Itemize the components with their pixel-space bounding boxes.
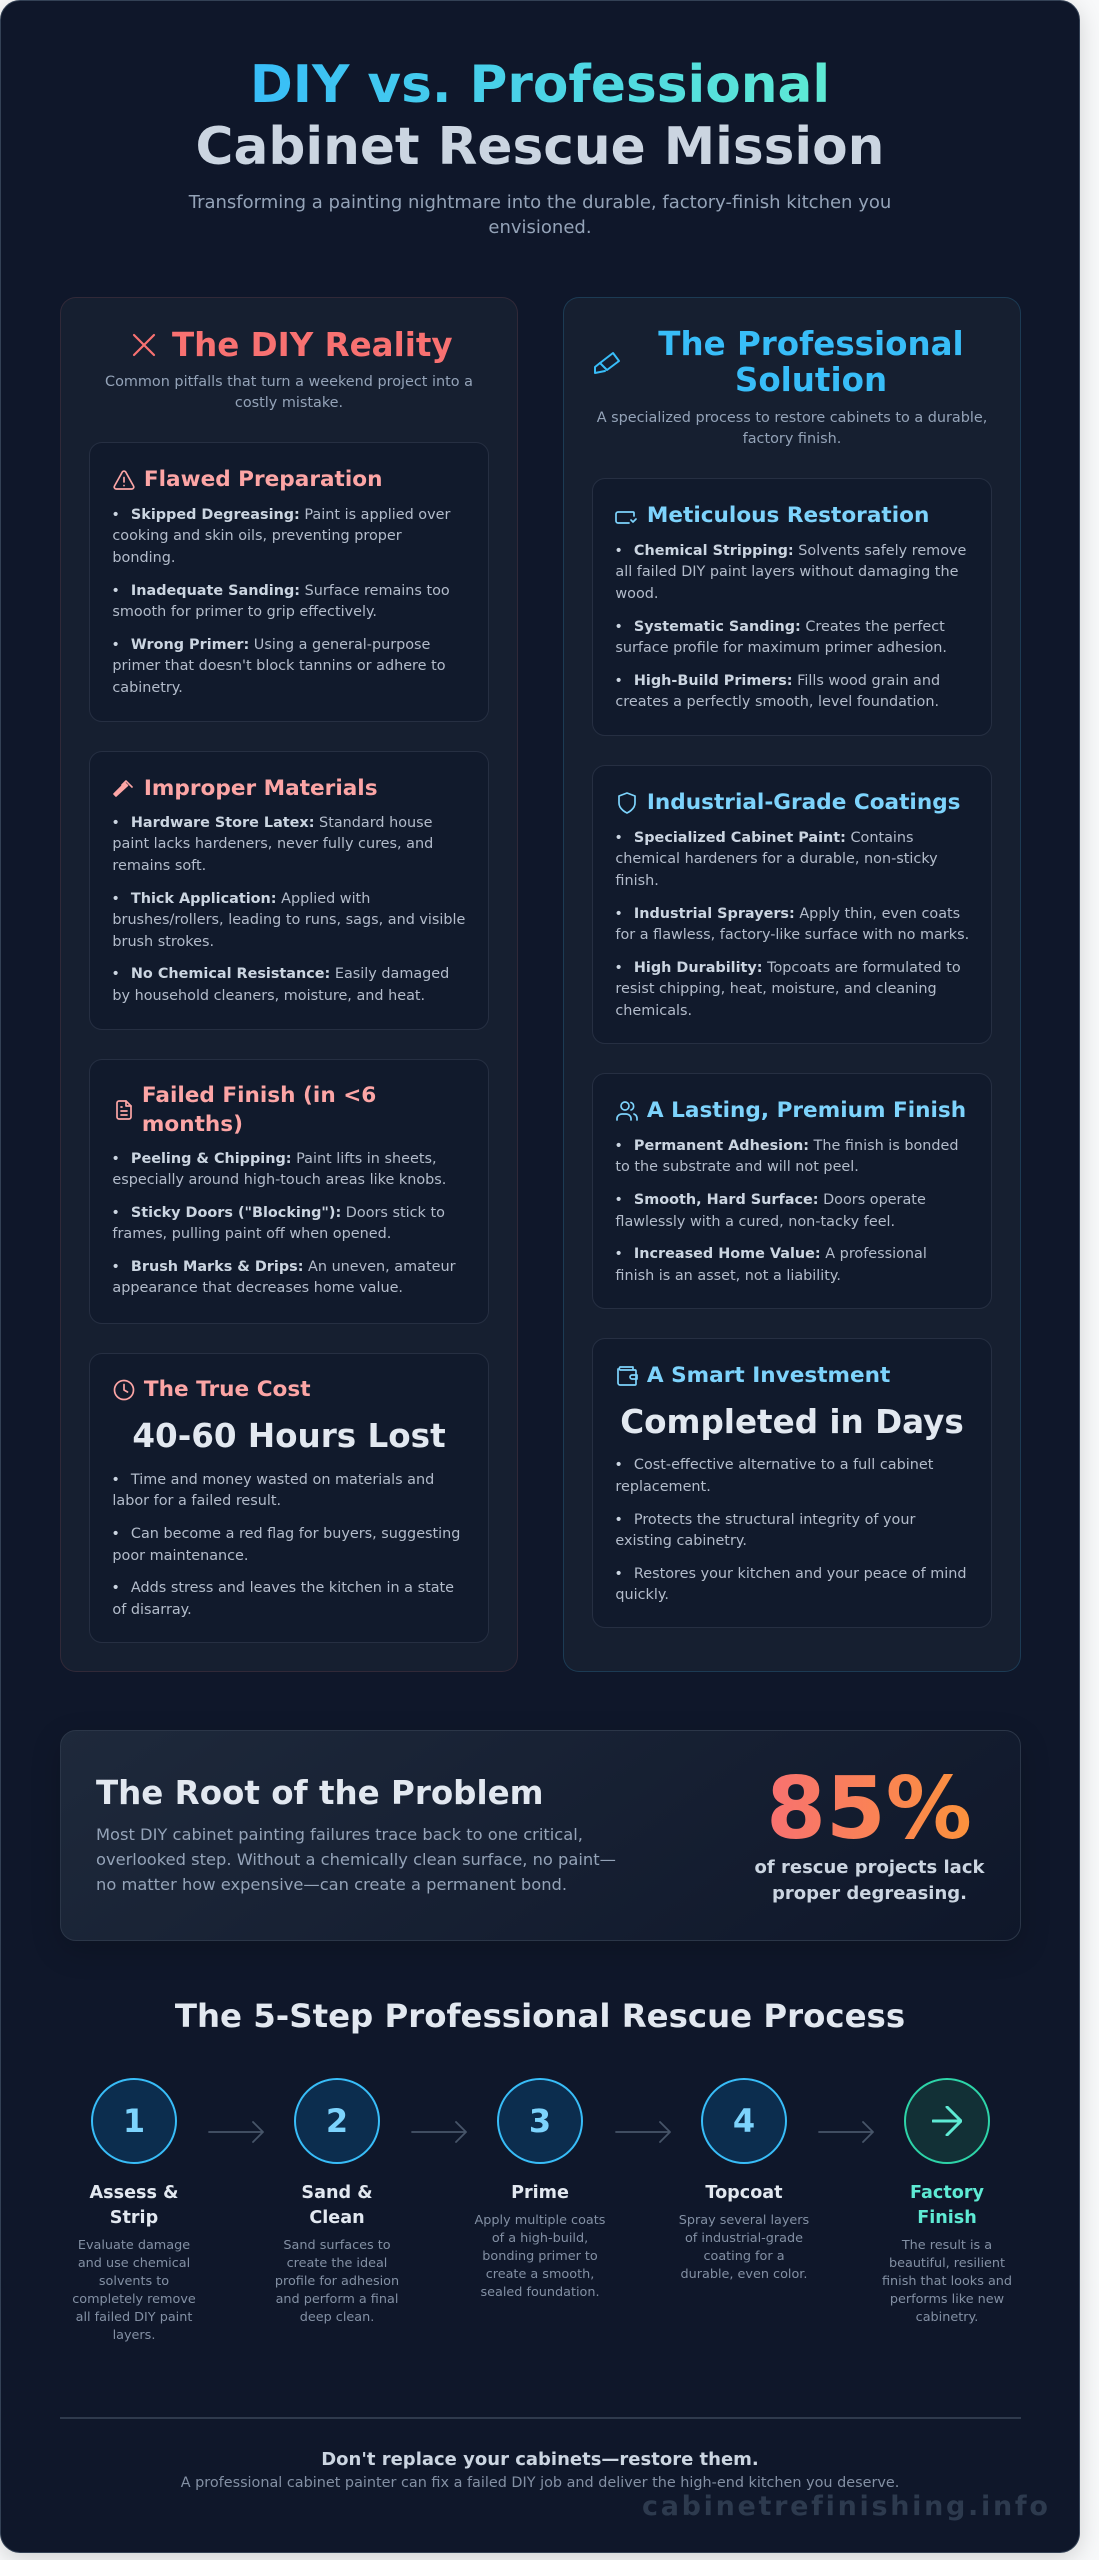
bullet list: Skipped Degreasing: Paint is applied over [131, 507, 450, 523]
bullet list: surface profile for maximum primer adhesion. [615, 640, 947, 656]
bullet list: • [111, 637, 120, 653]
arrow 2 [411, 2121, 467, 2143]
bullet list: all failed DIY paint layers without damaging the [615, 564, 958, 580]
bullet list: Industrial Sprayers: Apply thin, even coats [634, 906, 960, 922]
bullet list: finish. [615, 873, 659, 889]
card: flawed preparation [89, 442, 489, 722]
card heading: A Lasting, Premium Finish [647, 1098, 966, 1123]
professional subtitle: factory finish. [743, 431, 841, 447]
bullet list: • [111, 891, 120, 907]
bullet list: • [111, 1526, 120, 1542]
bullet list: • [614, 906, 623, 922]
card: meticulous restoration [592, 478, 992, 736]
icon: X [132, 334, 156, 356]
bullet list: Can become a red flag for buyers, suggesting [131, 1526, 460, 1542]
bullet list: Adds stress and leaves the kitchen in a state [131, 1580, 454, 1596]
step description: finish that looks and [882, 2274, 1012, 2289]
bullet list: • [111, 1472, 120, 1488]
bullet list [111, 815, 465, 1004]
bullet list: • [614, 1457, 623, 1473]
bullet list: appearance that decreases home value. [112, 1280, 403, 1296]
bullet list: Increased Home Value: A professional [634, 1246, 927, 1262]
step title [90, 2182, 178, 2228]
step description: coating for a [703, 2249, 785, 2264]
subtitle [188, 192, 891, 238]
bullet list: • [614, 830, 623, 846]
step description: Spray several layers [679, 2213, 809, 2228]
bullet list: quickly. [615, 1587, 669, 1603]
bullet list: • [111, 1205, 120, 1221]
number circle: 1 [123, 2102, 145, 2140]
bullet list: • [614, 1246, 623, 1262]
bullet list: • [111, 966, 120, 982]
footer text: A professional cabinet painter can fix a failed DIY job and deliver the high-end kitchen you deserve. [181, 2475, 899, 2491]
bullet list: Cost-effective alternative to a full cabinet [634, 1457, 933, 1473]
bullet list: Protects the structural integrity of your [634, 1512, 915, 1528]
bullet list: paint lacks hardeners, never fully cures, and [112, 836, 433, 852]
bullet list: remains soft. [112, 858, 206, 874]
number circle [497, 2078, 583, 2164]
bullet list: Inadequate Sanding: Surface remains too [131, 583, 450, 599]
number circle [701, 2078, 787, 2164]
professional heading: Solution [735, 361, 887, 399]
bullet list: High Durability: Topcoats are formulated to [634, 960, 961, 976]
step description: sealed foundation. [480, 2285, 600, 2300]
panel: the DIY reality [60, 297, 518, 1672]
bullet list: • [614, 1566, 623, 1582]
step description [474, 2213, 605, 2300]
bullet list: replacement. [615, 1479, 711, 1495]
bullet list: No Chemical Resistance: Easily damaged [131, 966, 449, 982]
bullet list: • [111, 1259, 120, 1275]
bullet list: • [111, 1580, 120, 1596]
step description [857, 2237, 1037, 2327]
card heading: Failed Finish (in <6 [142, 1083, 376, 1108]
arrow 4 [818, 2121, 874, 2143]
step description [72, 2238, 196, 2343]
bullet list: finish is an asset, not a liability. [615, 1268, 841, 1284]
DIY subtitle: costly mistake. [235, 395, 343, 411]
root text: overlooked step. Without a chemically clean surface, no paint— [96, 1850, 616, 1869]
bullet list: Brush Marks & Drips: An uneven, amateur [131, 1259, 456, 1275]
bullet list: • [614, 673, 623, 689]
bullet list: • [111, 1150, 120, 1166]
root text [96, 1825, 616, 1894]
step description [679, 2213, 809, 2282]
bullet list: by household cleaners, moisture, and heat. [112, 988, 425, 1004]
card heading: Industrial-Grade Coatings [647, 790, 961, 815]
step title: Clean [309, 2208, 365, 2228]
DIY subtitle: Common pitfalls that turn a weekend project into a [105, 374, 473, 390]
number circle: 3 [529, 2102, 551, 2140]
subtitle: Transforming a painting nightmare into the durable, factory-finish kitchen you [189, 192, 891, 213]
step description: of a high-build, [492, 2231, 588, 2246]
card: a lasting, premium finish [592, 1073, 992, 1309]
bullet list: especially around high-touch areas like knobs. [112, 1172, 446, 1188]
bullet list: • [614, 1512, 623, 1528]
step title [301, 2182, 373, 2228]
watermark: cabinetrefinishing.info [642, 2491, 1051, 2522]
step description: beautiful, resilient [889, 2256, 1005, 2271]
step 5 [857, 2078, 1037, 2358]
bullet list: labor for a failed result. [112, 1493, 281, 1509]
title [196, 55, 884, 176]
bullet list: Sticky Doors ("Blocking"): Doors stick to [131, 1205, 445, 1221]
step 1 [72, 2078, 196, 2343]
step description: performs like new [890, 2292, 1004, 2307]
stat caption [755, 1857, 985, 1904]
professional subtitle: A specialized process to restore cabinets to a durable, [597, 410, 987, 426]
number circle: 4 [733, 2102, 755, 2140]
step 4 [679, 2078, 809, 2282]
step description: Apply multiple coats [475, 2213, 605, 2228]
step description: create a smooth, [486, 2267, 594, 2282]
step description: and perform a final [276, 2292, 398, 2307]
bullet list: • [614, 1192, 623, 1208]
bullet list [614, 543, 966, 710]
title: DIY vs. Professional [250, 55, 830, 115]
step description: Evaluate damage [78, 2238, 190, 2253]
step title: Strip [110, 2208, 158, 2228]
bullet list: wood. [615, 586, 658, 602]
step description: of industrial-grade [685, 2231, 803, 2246]
bullet list: bonding. [112, 550, 175, 566]
card heading: months) [142, 1112, 243, 1137]
card heading: A Smart Investment [647, 1363, 890, 1388]
arrow 3 [615, 2121, 671, 2143]
card: the true cost [89, 1353, 489, 1643]
big stat: 40-60 Hours Lost [132, 1417, 446, 1455]
bullet list: Chemical Stripping: Solvents safely remove [634, 543, 966, 559]
bullet list: brush strokes. [112, 934, 214, 950]
bullet list: creates a perfectly smooth, level foundation. [615, 694, 939, 710]
root text: no matter how expensive—can create a permanent bond. [96, 1875, 567, 1894]
step description: layers. [113, 2328, 155, 2343]
root heading: The Root of the Problem [96, 1774, 544, 1812]
bullet list: • [111, 583, 120, 599]
bullet list: chemicals. [615, 1003, 692, 1019]
bullet list: poor maintenance. [112, 1548, 248, 1564]
bullet list: Smooth, Hard Surface: Doors operate [634, 1192, 926, 1208]
step description: solvents to [99, 2274, 169, 2289]
bullet list: Wrong Primer: Using a general-purpose [131, 637, 430, 653]
step description: Sand surfaces to [283, 2238, 391, 2253]
step description: deep clean. [300, 2310, 374, 2325]
step description: all failed DIY paint [76, 2310, 192, 2325]
card heading: Flawed Preparation [144, 467, 382, 492]
step title: Prime [511, 2182, 569, 2202]
bullet list [111, 1150, 456, 1296]
step 3 [474, 2078, 605, 2300]
card: industrial-grade coatings [592, 765, 992, 1044]
stat caption: of rescue projects lack [755, 1857, 984, 1878]
bullet list: for a flawless, factory-like surface with no marks. [615, 927, 969, 943]
arrow circle [904, 2078, 990, 2164]
bullet list: • [614, 1138, 623, 1154]
subtitle: envisioned. [488, 217, 592, 238]
bullet list [614, 1457, 966, 1603]
step description: and use chemical [78, 2256, 190, 2271]
card: failed finish [89, 1059, 489, 1324]
card heading: Improper Materials [144, 776, 378, 801]
step title: Assess & [90, 2182, 178, 2202]
bullet list: Thick Application: Applied with [131, 891, 370, 907]
step description: durable, even color. [681, 2267, 807, 2282]
step 2 [275, 2078, 399, 2325]
bullet list: Restores your kitchen and your peace of mind [634, 1566, 966, 1582]
bullet list: existing cabinetry. [615, 1533, 747, 1549]
icon: arrow right [932, 2106, 962, 2136]
bullet list: primer that doesn't block tannins or adhere to [112, 658, 446, 674]
icon: paintbrush [594, 352, 620, 374]
bullet list: • [111, 815, 120, 831]
bullet list: resist chipping, heat, moisture, and cleaning [615, 981, 937, 997]
step description: profile for adhesion [275, 2274, 399, 2289]
DIY subtitle [105, 374, 473, 411]
bullet list: Permanent Adhesion: The finish is bonded [634, 1138, 959, 1154]
bullet list: frames, pulling paint off when opened. [112, 1226, 391, 1242]
professional heading: The Professional [658, 325, 964, 363]
bullet list: Systematic Sanding: Creates the perfect [634, 619, 945, 635]
card: improper materials [89, 751, 489, 1030]
bullet list: • [111, 507, 120, 523]
step description [275, 2238, 399, 2325]
DIY heading: The DIY Reality [172, 326, 453, 364]
number circle [91, 2078, 177, 2164]
stat: 85%: 85% [766, 1759, 972, 1859]
big stat: Completed in Days [620, 1403, 964, 1441]
step description: create the ideal [287, 2256, 387, 2271]
number circle [294, 2078, 380, 2164]
card heading: The True Cost [144, 1377, 311, 1402]
card: a smart investment [592, 1338, 992, 1628]
bullet list: • [614, 619, 623, 635]
bullet list: High-Build Primers: Fills wood grain and [634, 673, 940, 689]
panel: the professional solution [563, 297, 1021, 1672]
bullet list: Peeling & Chipping: Paint lifts in sheets, [131, 1150, 437, 1166]
step title: Factory [910, 2182, 984, 2202]
bullet list: Specialized Cabinet Paint: Contains [634, 830, 914, 846]
bullet list: cabinetry. [112, 680, 183, 696]
bullet list: Hardware Store Latex: Standard house [131, 815, 432, 831]
professional subtitle [596, 410, 987, 447]
bullet list: of disarray. [112, 1602, 192, 1618]
bullet list: brushes/rollers, leading to runs, sags, and visible [112, 912, 465, 928]
stat caption: proper degreasing. [772, 1882, 967, 1904]
bullet list: • [614, 543, 623, 559]
bullet list: smooth for primer to grip effectively. [112, 604, 377, 620]
step description: The result is a [902, 2238, 992, 2253]
root text: Most DIY cabinet painting failures trace back to one critical, [96, 1825, 583, 1844]
bullet list: • [614, 960, 623, 976]
card heading [116, 1083, 376, 1137]
bullet list [111, 507, 450, 696]
step title [857, 2180, 1037, 2230]
professional heading [658, 325, 964, 399]
arrow 1 [208, 2121, 264, 2143]
bullet list: flawlessly with a cured, non-tacky feel. [615, 1214, 895, 1230]
step title: Topcoat [705, 2182, 783, 2202]
step title: Sand & [301, 2182, 373, 2202]
bullet list [614, 830, 969, 1019]
footer headline: Don't replace your cabinets—restore them. [321, 2449, 759, 2470]
title: Cabinet Rescue Mission [196, 116, 884, 176]
bullet list: to the substrate and will not peel. [615, 1159, 859, 1175]
bullet list: chemical hardeners for a durable, non-sticky [615, 851, 938, 867]
panel: root of the problem [60, 1730, 1021, 1941]
step title: Finish [917, 2208, 977, 2228]
bullet list: Time and money wasted on materials and [131, 1472, 434, 1488]
step description: cabinetry. [916, 2310, 978, 2325]
step description: completely remove [72, 2292, 196, 2307]
bullet list [614, 1138, 959, 1284]
bullet list [111, 1472, 460, 1618]
process heading: The 5-Step Professional Rescue Process [175, 1997, 905, 2035]
card heading: Meticulous Restoration [647, 503, 929, 528]
number circle: 2 [326, 2102, 348, 2140]
bullet list: cooking and skin oils, preventing proper [112, 528, 402, 544]
step description: bonding primer to [482, 2249, 598, 2264]
